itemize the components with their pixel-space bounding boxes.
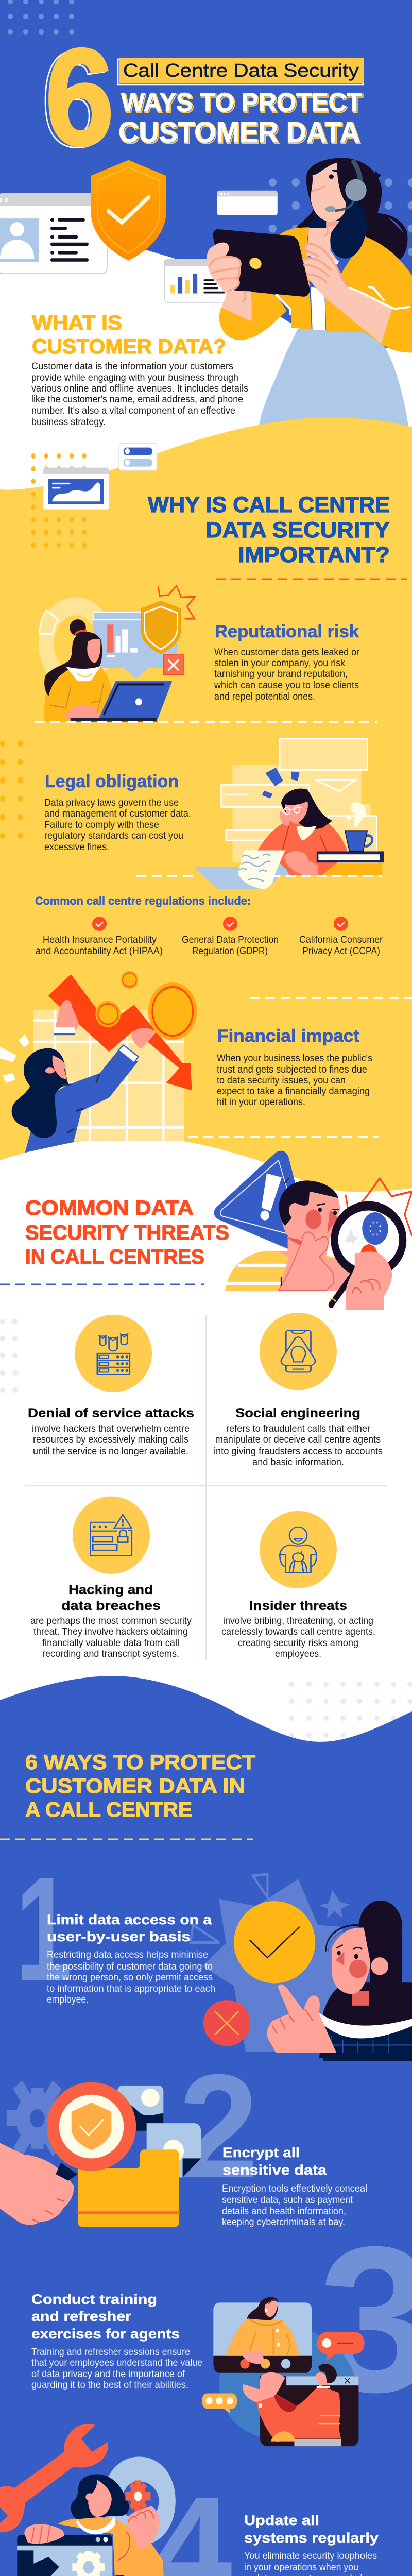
panel: way 3 training: [31, 2204, 412, 2446]
body text: sensitive data, such as payment: [222, 2195, 353, 2206]
heading: COMMON DATA: [25, 1197, 194, 1219]
body text: expect to take a financially damaging: [217, 1086, 370, 1097]
body text: tarnishing your brand reputation,: [214, 669, 348, 680]
body text: and basic information.: [252, 1457, 344, 1468]
regulation: CCPA: California Consumer: [299, 935, 383, 945]
dots: orange grid on yellow: [31, 479, 87, 548]
heading: Insider threats: [249, 1599, 347, 1613]
body text: into giving fraudsters access to accounts: [214, 1446, 383, 1457]
illustration: hero cards and shield: [0, 160, 278, 302]
regulation: HIPAA: Health Insurance Portability: [43, 935, 157, 945]
body text: When your business loses the public's: [217, 1053, 372, 1064]
body text: [222, 2183, 367, 2228]
body text: hit in your operations.: [217, 1097, 305, 1108]
illustration: base of screen continuation: [115, 2575, 164, 2576]
body text: [214, 647, 360, 702]
body text: Training and refresher sessions ensure: [31, 2347, 190, 2358]
threat: insider threats: [221, 1511, 375, 1659]
heading: IN CALL CENTRES: [25, 1246, 204, 1268]
toggle card: [119, 443, 157, 470]
heading: [61, 1583, 161, 1613]
shield with check: [91, 160, 166, 261]
panel: common data security threats: [0, 1197, 387, 1660]
illustration: stressed woman with paperwork: [0, 739, 384, 889]
heading: Conduct training: [31, 2292, 157, 2307]
heading: data breaches: [61, 1599, 161, 1613]
background: lower blue section: [0, 1676, 412, 2576]
dots: orange grid: [31, 453, 87, 510]
body text: which can cause you to lose clients: [214, 680, 359, 691]
section: what is customer data: [31, 312, 248, 428]
body text: guarding it to the best of their abilities.: [31, 2380, 188, 2391]
heading: Hacking and: [68, 1583, 153, 1597]
heading: systems regularly: [244, 2530, 379, 2546]
body text: [221, 1616, 375, 1659]
body text: financially valuable data from call: [42, 1638, 179, 1649]
illustration: video call training: [202, 2297, 365, 2446]
threat: hacking and data breaches: [30, 1496, 192, 1659]
heading: 6 ways to protect customer data in a call centre: [25, 1751, 255, 1821]
headline: CUSTOMER DATA: [118, 116, 360, 149]
body text: Data privacy laws govern the use: [44, 798, 179, 808]
body text: in your operations when you: [244, 2562, 358, 2573]
heading: and refresher: [31, 2309, 132, 2324]
body text: threat. They involve hackers obtaining: [33, 1626, 188, 1637]
body text: refers to fraudulent calls that either: [226, 1423, 371, 1434]
subtitle label: [118, 58, 364, 84]
profile card: [0, 194, 107, 274]
title: [41, 20, 364, 176]
body text: various online and offline avenues. It includes details: [31, 383, 248, 394]
panel: financial impact: [0, 971, 372, 1153]
icon: person with hidden figure: [260, 1511, 337, 1588]
background: yellow section: [0, 417, 412, 1192]
heading: [222, 2145, 327, 2178]
body text: [31, 2347, 202, 2391]
icon: browser with lock and warning: [73, 1496, 150, 1574]
heading: Common call centre regulations include:: [35, 894, 251, 907]
regulation: GDPR: General Data Protection: [182, 935, 279, 945]
heading: Social engineering: [235, 1406, 360, 1420]
subtitle label: Call Centre Data Security: [123, 60, 359, 81]
heading: exercises for agents: [31, 2326, 180, 2342]
body text: to data security issues, you can: [217, 1075, 346, 1086]
headline: WAYS TO PROTECT: [122, 89, 363, 118]
body text: [31, 361, 248, 428]
headline: WAYS TO PROTECT: [121, 88, 362, 117]
body text: Failure to comply with these: [44, 820, 159, 831]
heading: why is call centre data security important: IMPORTANT?: [238, 543, 390, 567]
heading: Reputational risk: [215, 622, 359, 641]
heading: Financial impact: [217, 1026, 359, 1046]
heading: user-by-user basis: [47, 1929, 191, 1944]
heading: [47, 1912, 212, 1944]
body text: that your employees understand the value: [31, 2358, 202, 2368]
icon: phone with skull warning: [260, 1313, 337, 1390]
illustration: small dashboard cards: [43, 443, 157, 510]
heading: Update all: [244, 2513, 319, 2528]
heading: why is call centre data security important: [148, 493, 390, 567]
area chart card: [43, 468, 109, 510]
body text: resources by excessively making calls: [33, 1434, 188, 1445]
regulation: HIPAA: [36, 917, 163, 957]
heading: 6 ways to protect customer data in a call centre: 6 WAYS TO PROTECT: [25, 1751, 255, 1774]
small window: [217, 191, 278, 215]
body text: like the customer's name, email address, and phone: [31, 394, 243, 405]
body text: [244, 2551, 377, 2576]
body text: provide while engaging with your business through: [31, 372, 238, 383]
body text: involve bribing, threatening, or acting: [223, 1616, 373, 1626]
illustration: woman fixing system with wrench: [0, 2424, 176, 2576]
body text: details and health information,: [222, 2206, 346, 2217]
headline: CUSTOMER DATA: [119, 117, 361, 150]
panel: legal obligation: [0, 739, 384, 889]
regulation: GDPR: Regulation (GDPR): [192, 946, 268, 957]
heading: [25, 1197, 229, 1268]
threat: denial of service: [28, 1315, 194, 1457]
body text: Customer data is the information your customers: [31, 361, 233, 372]
regulation: HIPAA: and Accountability Act (HIPAA): [36, 946, 163, 957]
heading: Limit data access on a: [47, 1912, 212, 1927]
body text: [32, 1423, 190, 1457]
body text: involve hackers that overwhelm centre: [32, 1423, 190, 1434]
headline: [118, 88, 363, 150]
chart window: [164, 260, 243, 302]
body text: the wrong person, so only permit access: [47, 1972, 213, 1983]
body text: You eliminate security loopholes: [244, 2551, 377, 2562]
illustration: woman at laptop with warning shield: [39, 586, 195, 722]
body text: recording and transcript systems.: [42, 1649, 179, 1659]
body text: [44, 798, 191, 853]
body text: and management of customer data.: [44, 808, 191, 819]
icon: server under bombs: [75, 1315, 152, 1392]
body text: employees.: [275, 1649, 321, 1659]
body text: manipulate or deceive call centre agents: [215, 1434, 381, 1445]
body text: until the service is no longer available.: [33, 1446, 188, 1457]
regulation: CCPA: [299, 917, 383, 957]
heading: CUSTOMER DATA?: [32, 335, 226, 358]
body text: carelessly towards call centre agents,: [221, 1626, 375, 1637]
illustration: woman pointing at check: [191, 1874, 412, 2061]
body text: [30, 1616, 192, 1659]
body text: [217, 1053, 372, 1108]
body text: regulatory standards can cost you: [44, 831, 183, 841]
heading: 6 ways to protect customer data in a call centre: A CALL CENTRE: [25, 1799, 192, 1821]
body text: When customer data gets leaked or: [214, 647, 360, 658]
heading: [31, 2292, 180, 2342]
body text: employee.: [47, 1994, 89, 2005]
body text: [47, 1950, 215, 2005]
panel: way 1 limit data access: [15, 1846, 412, 2061]
body text: are perhaps the most common security: [30, 1616, 192, 1626]
regulation: CCPA: Privacy Act (CCPA): [302, 946, 380, 957]
panel: way 4 update systems: [0, 2424, 379, 2576]
number 2: 2: [179, 2043, 259, 2209]
big number 6: 6: [45, 20, 114, 174]
big number 6: 6: [41, 21, 111, 176]
heading: WHAT IS: [32, 312, 122, 334]
body text: the possibility of customer data going to: [47, 1961, 213, 1972]
illustration: magnifier over folder: [0, 2080, 201, 2227]
heading: SECURITY THREATS: [25, 1222, 229, 1244]
heading: [32, 312, 226, 358]
body text: Restricting data access helps minimise: [47, 1950, 208, 1960]
regulation: GDPR: [182, 917, 279, 957]
panel: common regulations: [35, 894, 383, 957]
heading: Denial of service attacks: [28, 1406, 194, 1420]
threat: social engineering: [214, 1313, 383, 1468]
body text: trust and gets subjected to fines due: [217, 1064, 367, 1075]
illustration: woman with falling arrow and coins: [0, 971, 197, 1153]
panel: reputational risk: [39, 586, 360, 722]
heading: sensitive data: [222, 2162, 327, 2178]
heading: Legal obligation: [45, 772, 179, 791]
body text: to information that is appropriate to each: [47, 1984, 215, 1994]
body text: of data privacy and the importance of: [31, 2369, 185, 2380]
body text: Encryption tools effectively conceal: [222, 2183, 367, 2194]
heading: why is call centre data security important: WHY IS CALL CENTRE: [148, 493, 390, 517]
heading: 6 ways to protect customer data in a call centre: CUSTOMER DATA IN: [25, 1775, 245, 1798]
body text: keeping cybercriminals at bay.: [222, 2217, 345, 2228]
heading: [244, 2513, 379, 2546]
dots: above blue wave: [289, 1682, 412, 1738]
body text: creating security risks among: [238, 1638, 358, 1649]
background: top blue: [0, 0, 412, 348]
illustration: hero woman with headset and tablet: [207, 158, 412, 427]
body text: excessive fines.: [44, 842, 109, 853]
number 1: 1: [15, 1846, 72, 2011]
dots: top left: [8, 0, 74, 35]
body text: business strategy.: [31, 417, 106, 428]
body text: [214, 1423, 383, 1468]
panel: way 2 encrypt: [0, 2043, 367, 2228]
illustration: detective man with warning sign and magnifier: [214, 1151, 412, 1310]
body text: and repel potential ones.: [214, 691, 315, 702]
heading: Encrypt all: [222, 2145, 300, 2160]
body text: number. It's also a vital component of an effective: [31, 405, 235, 416]
heading: why is call centre data security important: DATA SECURITY: [205, 518, 390, 543]
body text: stolen in your company, you risk: [214, 658, 345, 669]
